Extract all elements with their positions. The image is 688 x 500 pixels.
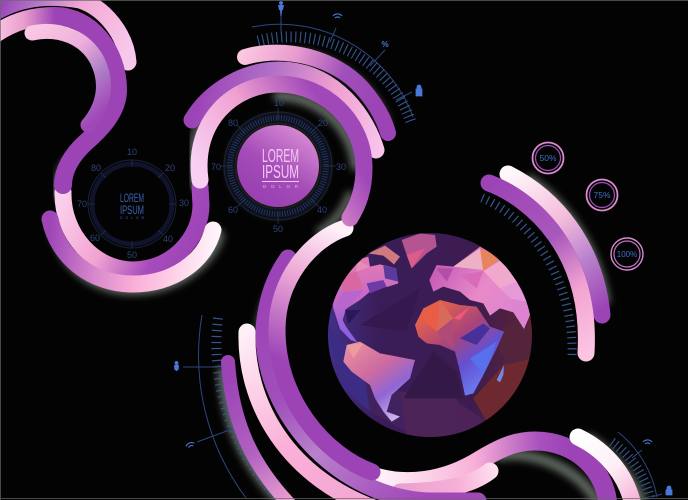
land: Eurasia bbox=[429, 247, 531, 329]
land: Africa facets bbox=[420, 300, 497, 375]
dial: centre gauge bbox=[211, 98, 346, 234]
icon: percent: % bbox=[381, 40, 389, 49]
dial: centre gauge: 60 bbox=[228, 205, 238, 215]
dial: centre gauge: 40 bbox=[317, 205, 327, 215]
icon: person bbox=[174, 361, 179, 371]
scale: top arc bbox=[252, 1, 422, 122]
percent badge: 75% bbox=[586, 180, 618, 210]
centre circle with title: IPSUM bbox=[262, 162, 299, 182]
dial: left gauge: 70 bbox=[77, 199, 87, 209]
dial: left gauge: 10 bbox=[127, 147, 137, 157]
bands: lower centre sweep bbox=[228, 228, 478, 500]
land: North America bbox=[332, 257, 398, 342]
ocean facets bbox=[327, 288, 533, 438]
land: Africa bbox=[415, 300, 504, 396]
dial: centre gauge: 10 bbox=[274, 98, 284, 108]
scale: bottom right arc bbox=[612, 432, 672, 497]
percent badge: 50% bbox=[532, 142, 564, 174]
land: Greenland facet bbox=[407, 248, 425, 268]
dial: centre gauge: 50 bbox=[273, 224, 283, 234]
dial: centre gauge: 80 bbox=[228, 118, 238, 128]
dial: left gauge: 20 bbox=[165, 163, 175, 173]
glow behind bands bbox=[56, 55, 640, 500]
icon: lock bbox=[666, 486, 672, 495]
dial: centre gauge: 20 bbox=[318, 118, 328, 128]
dial: left gauge: 30 bbox=[179, 198, 189, 208]
dial: left gauge: 40 bbox=[163, 234, 173, 244]
icon: person bbox=[278, 1, 284, 16]
centre circle with title bbox=[237, 125, 319, 207]
dial: left gauge: LOREM bbox=[120, 191, 144, 205]
icon: wifi bbox=[643, 440, 652, 444]
icon: wifi bbox=[333, 14, 342, 18]
land: South America bbox=[343, 342, 415, 422]
globe bbox=[327, 233, 533, 438]
dial: left gauge: DOLOR bbox=[120, 216, 144, 220]
land: Greenland bbox=[402, 233, 437, 268]
dial: left gauge: 50 bbox=[127, 250, 137, 260]
dial: left gauge: 60 bbox=[90, 233, 100, 243]
land: South America facet bbox=[347, 343, 363, 358]
land: Eurasia facets bbox=[437, 248, 527, 302]
percent badge: 100% bbox=[611, 238, 643, 270]
icon: lock bbox=[416, 85, 422, 96]
dial: centre gauge: 30 bbox=[336, 162, 346, 172]
bands: centre rings bbox=[192, 53, 388, 218]
land: Madagascar bbox=[497, 365, 504, 382]
percent badge: 75%: 75% bbox=[593, 190, 611, 200]
dial: left gauge: 80 bbox=[91, 163, 101, 173]
dial: left gauge bbox=[77, 147, 189, 260]
icon: wifi bbox=[185, 441, 195, 448]
bands: bottom right wave bbox=[372, 437, 634, 500]
bands: right arcs bbox=[489, 174, 602, 353]
percent badge: 50%: 50% bbox=[539, 153, 557, 163]
scale: bottom left arc bbox=[174, 315, 277, 498]
dial: left gauge: IPSUM bbox=[120, 203, 144, 217]
percent badge: 100%: 100% bbox=[617, 250, 637, 259]
bands: top left swirl bbox=[0, 0, 128, 185]
land: Arctic islands bbox=[368, 246, 400, 264]
bands: lower left swirl bbox=[50, 187, 213, 284]
centre circle with title: LOREM bbox=[262, 146, 299, 166]
centre circle with title: DOLOR bbox=[263, 184, 299, 189]
dial: centre gauge: 70 bbox=[211, 162, 221, 172]
land: North America facets bbox=[335, 260, 398, 324]
scale: right arc bbox=[482, 198, 572, 358]
